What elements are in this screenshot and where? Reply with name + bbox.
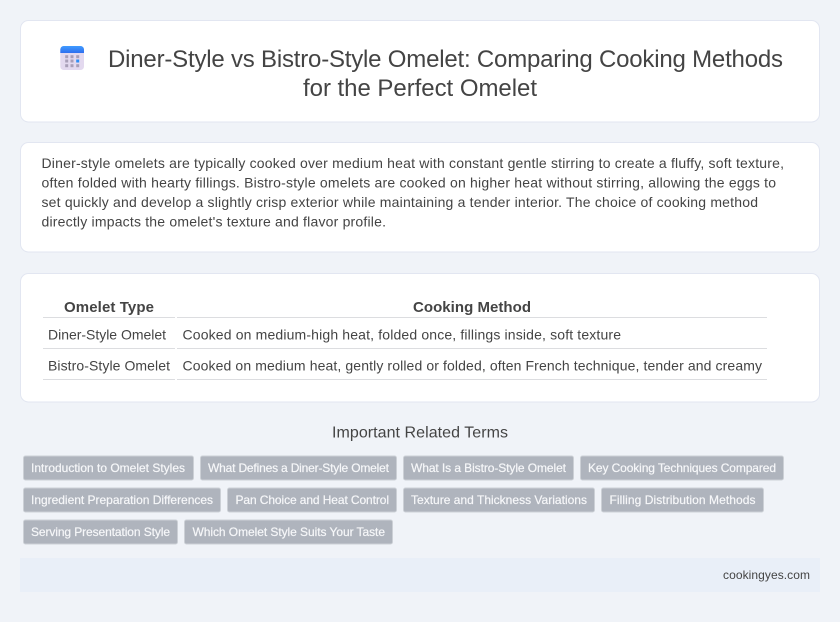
tag: What Is a Bistro-Style Omelet	[411, 461, 567, 475]
text block: summary: Diner-style omelets are typically cooked over medium heat with constant gentle stirring to create a fluffy, soft texture,	[42, 155, 784, 171]
table row: diner-style: Diner-Style Omelet	[48, 326, 166, 342]
tag	[24, 488, 220, 512]
tag	[24, 520, 178, 544]
tag	[602, 488, 764, 512]
tag: Texture and Thickness Variations	[411, 493, 587, 507]
tag: What Defines a Diner-Style Omelet	[208, 461, 390, 475]
tag list: related terms	[24, 456, 784, 544]
tag	[184, 520, 392, 544]
tag: Key Cooking Techniques Compared	[588, 461, 776, 475]
tag	[24, 456, 194, 480]
heading: important related terms: Important Related Terms	[332, 424, 508, 442]
title	[108, 46, 783, 102]
tag: Pan Choice and Heat Control	[236, 493, 389, 507]
table row: bistro-style: Cooked on medium heat, gently rolled or folded, often French technique, tender and creamy	[182, 358, 762, 374]
footer: source site: cookingyes.com	[723, 568, 810, 582]
panel: header	[20, 20, 820, 122]
tag	[228, 488, 396, 512]
icon: calendar	[60, 46, 84, 70]
tag: Serving Presentation Style	[31, 525, 170, 539]
tag	[200, 456, 396, 480]
tag	[404, 456, 574, 480]
title: for the Perfect Omelet	[303, 75, 537, 102]
title: Diner-Style vs Bistro-Style Omelet: Comparing Cooking Methods	[108, 46, 783, 73]
tag	[580, 456, 784, 480]
text block: summary	[42, 155, 784, 230]
table header: omelet type: Omelet Type	[64, 299, 154, 316]
text block: summary: directly impacts the omelet's texture and flavor profile.	[42, 214, 386, 230]
panel: comparison table	[20, 274, 820, 402]
tag: Which Omelet Style Suits Your Taste	[192, 525, 385, 539]
panel: summary paragraph	[20, 142, 820, 252]
table row: diner-style: Cooked on medium-high heat, folded once, fillings inside, soft texture	[182, 326, 621, 342]
tag: Ingredient Preparation Differences	[31, 493, 213, 507]
table header: cooking method: Cooking Method	[413, 299, 531, 316]
tag: Filling Distribution Methods	[610, 493, 756, 507]
tag: Introduction to Omelet Styles	[31, 461, 185, 475]
text block: summary: often folded with hearty fillings. Bistro-style omelets are cooked on higher heat without stirring, allowing the eggs to	[42, 174, 776, 190]
table row: bistro-style: Bistro-Style Omelet	[48, 358, 170, 374]
text block: summary: set quickly and develop a slightly crisp exterior while maintaining a tender interior. The choice of cooking method	[42, 194, 758, 210]
footer	[20, 558, 820, 592]
tag	[404, 488, 594, 512]
